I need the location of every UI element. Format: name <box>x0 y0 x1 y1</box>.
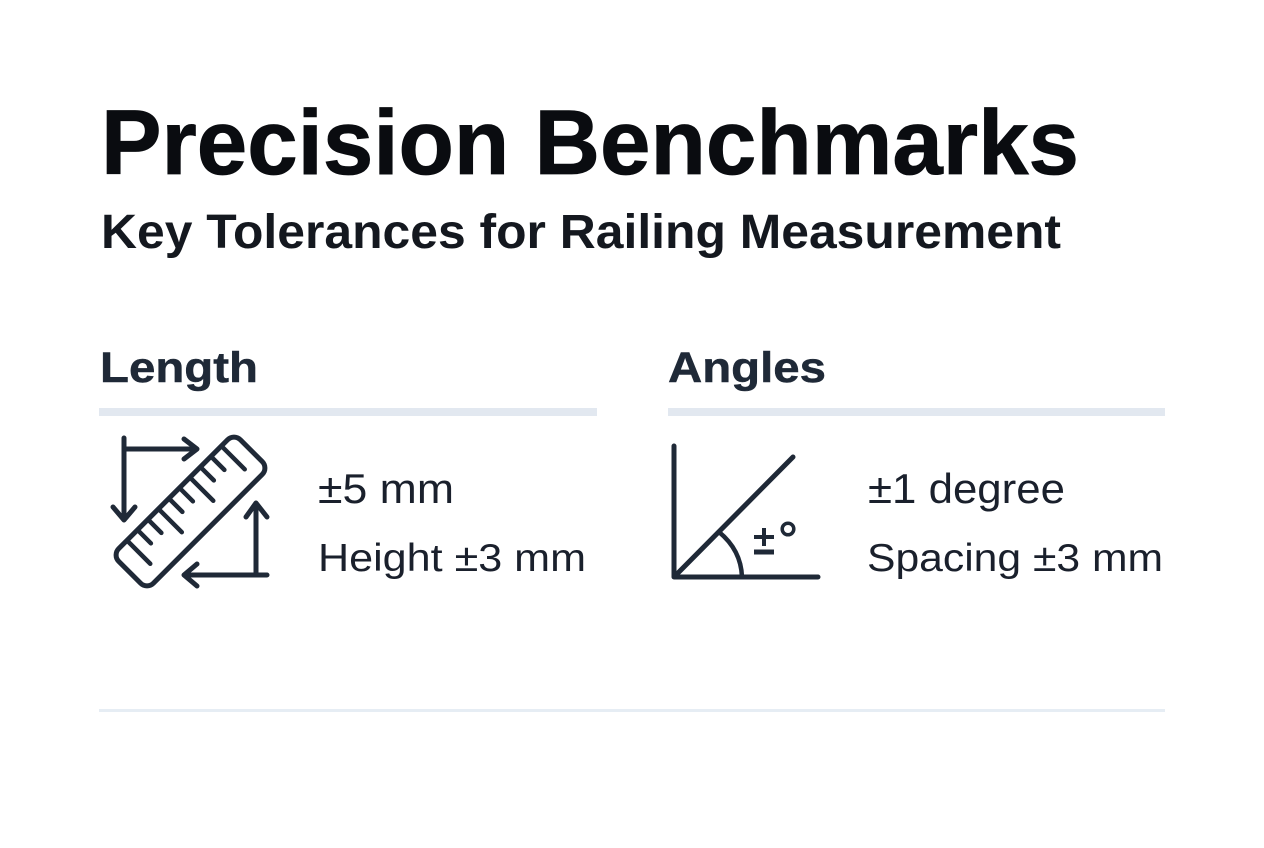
value: length tolerance: ±5 mm <box>318 465 454 512</box>
heading rule: angles <box>668 408 1165 416</box>
heading: angles: Angles <box>668 344 826 392</box>
value: spacing tolerance: Spacing ±3 mm <box>867 537 1163 580</box>
heading: length: Length <box>100 344 258 392</box>
heading rule: length <box>99 408 597 416</box>
icon: ruler with arrows <box>112 433 269 590</box>
value: height tolerance: Height ±3 mm <box>318 537 586 580</box>
panel: length <box>99 344 597 590</box>
title: Precision Benchmarks <box>101 92 1079 194</box>
value: angle tolerance: ±1 degree <box>868 465 1065 512</box>
icon: angle with plus-minus degree <box>674 446 818 577</box>
panel: angles <box>668 344 1165 580</box>
subtitle: Key Tolerances for Railing Measurement <box>101 206 1061 259</box>
